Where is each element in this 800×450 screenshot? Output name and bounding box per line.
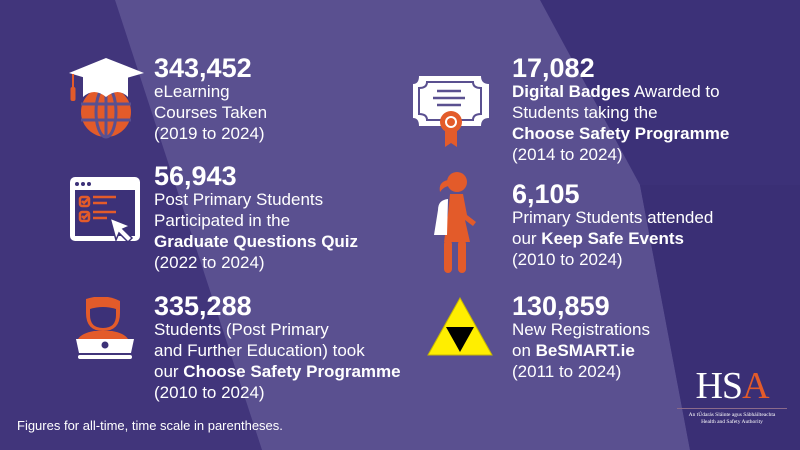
stat: besmart: New Registrations xyxy=(512,320,650,339)
stat: keep safe: our Keep Safe Events xyxy=(512,229,684,248)
logo: HSA: Health and Safety Authority xyxy=(701,419,763,425)
stat: besmart: 130,859 xyxy=(512,291,610,321)
stat: choose safety students: and Further Education) took xyxy=(154,341,365,360)
stat: elearning: eLearning xyxy=(154,82,230,101)
stat: keep safe xyxy=(512,179,713,269)
logo: HSA: HSA xyxy=(695,365,769,407)
icon: graduation cap globe xyxy=(69,58,144,138)
stat: elearning: (2019 to 2024) xyxy=(154,124,265,143)
stat: quiz xyxy=(154,161,358,272)
icon: quiz window xyxy=(70,177,140,241)
stat: besmart: on BeSMART.ie xyxy=(512,341,635,360)
stat: digital badges: (2014 to 2024) xyxy=(512,145,623,164)
stat: keep safe: 6,105 xyxy=(512,179,580,209)
stat: digital badges: Digital Badges Awarded to xyxy=(512,82,720,101)
stat: digital badges xyxy=(512,53,729,164)
stat: choose safety students xyxy=(154,291,401,402)
stat: keep safe: Primary Students attended xyxy=(512,208,713,227)
stat: quiz: Post Primary Students xyxy=(154,190,323,209)
icon: schoolgirl xyxy=(434,172,476,273)
stat: choose safety students: (2010 to 2024) xyxy=(154,383,265,402)
stat: quiz: (2022 to 2024) xyxy=(154,253,265,272)
stat: quiz: Graduate Questions Quiz xyxy=(154,232,358,251)
stat: digital badges: Choose Safety Programme xyxy=(512,124,729,143)
logo: HSA xyxy=(677,365,787,425)
stat: elearning: 343,452 xyxy=(154,53,252,83)
stat: quiz: 56,943 xyxy=(154,161,237,191)
icon: student with laptop xyxy=(76,297,134,359)
stat: elearning xyxy=(154,53,267,143)
stat: quiz: Participated in the xyxy=(154,211,290,230)
stat: choose safety students: Students (Post Primary xyxy=(154,320,329,339)
stat: keep safe: (2010 to 2024) xyxy=(512,250,623,269)
logo: HSA: An tÚdarás Sláinte agus Sábháilteachta xyxy=(689,412,775,418)
stat: besmart: (2011 to 2024) xyxy=(512,362,621,381)
stat: besmart xyxy=(512,291,650,381)
footnote: Figures for all-time, time scale in parentheses. xyxy=(17,418,283,433)
stat: elearning: Courses Taken xyxy=(154,103,267,122)
stat: choose safety students: our Choose Safety Programme xyxy=(154,362,401,381)
stat: digital badges: 17,082 xyxy=(512,53,595,83)
icon: besmart triangle xyxy=(427,297,493,356)
stat: choose safety students: 335,288 xyxy=(154,291,252,321)
icon: certificate xyxy=(413,76,489,147)
stat: digital badges: Students taking the xyxy=(512,103,658,122)
